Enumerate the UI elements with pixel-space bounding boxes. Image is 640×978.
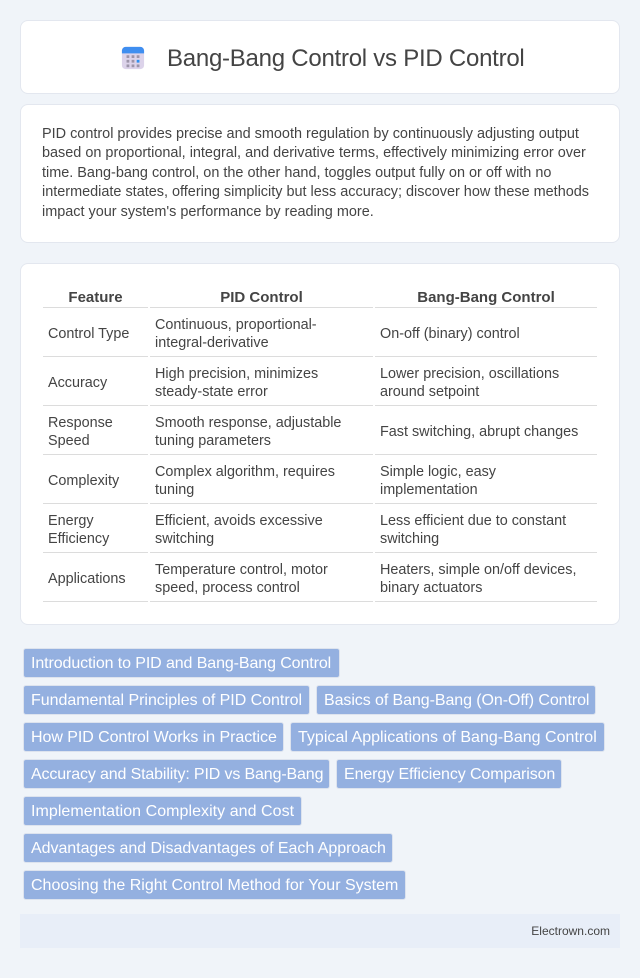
row: applications: Applications	[48, 571, 126, 587]
title: Bang-Bang Control vs PID Control	[167, 45, 525, 72]
row: energy efficiency: Energy	[48, 513, 94, 529]
table header row: PID Control	[220, 289, 303, 306]
row: applications: binary actuators	[380, 580, 482, 596]
row: response speed: Fast switching, abrupt changes	[380, 424, 578, 440]
tag: bang-bang basics	[316, 685, 596, 715]
tag: accuracy and stability	[23, 759, 330, 789]
table header row	[43, 289, 597, 308]
row: energy efficiency	[43, 513, 597, 553]
row: complexity: Complex algorithm, requires	[155, 464, 335, 480]
row: response speed: Smooth response, adjustable	[155, 415, 341, 431]
text block: introduction paragraph: based on proportional, integral, and derivative terms, effectively minimizing error over	[42, 145, 586, 161]
tag: PID in practice	[23, 722, 284, 752]
tag: advantages and disadvantages: Advantages and Disadvantages of Each Approach	[31, 840, 386, 857]
tag: energy efficiency: Energy Efficiency Comparison	[344, 766, 555, 783]
table header row: Feature	[68, 289, 123, 306]
panel: topic links	[23, 648, 605, 900]
tag: implementation complexity: Implementation Complexity and Cost	[31, 803, 294, 820]
tag: typical applications: Typical Applications of Bang-Bang Control	[298, 729, 597, 746]
tag: accuracy and stability: Accuracy and Stability: PID vs Bang-Bang	[31, 766, 323, 783]
row: complexity	[43, 464, 597, 504]
footer	[20, 914, 620, 948]
row: response speed	[43, 415, 597, 455]
text block: introduction paragraph: PID control provides precise and smooth regulation by continuously adjusting output	[42, 126, 579, 142]
row: complexity: implementation	[380, 482, 478, 498]
panel: header	[20, 20, 620, 94]
row: accuracy: Lower precision, oscillations	[380, 366, 559, 382]
row: complexity: Complexity	[48, 473, 119, 489]
tag: advantages and disadvantages	[23, 833, 393, 863]
row: applications: Temperature control, motor	[155, 562, 328, 578]
row: control type	[43, 317, 597, 357]
text block: introduction paragraph: time. Bang-bang control, on the other hand, toggles output fully on or off with no	[42, 165, 551, 181]
tag: bang-bang basics: Basics of Bang-Bang (On-Off) Control	[324, 692, 589, 709]
tag: fundamental principles	[23, 685, 310, 715]
tag: choosing the right method	[23, 870, 406, 900]
row: response speed: Speed	[48, 433, 90, 449]
text block: introduction paragraph	[42, 126, 589, 220]
row: accuracy: around setpoint	[380, 384, 479, 400]
tag: energy efficiency	[336, 759, 562, 789]
tag: typical applications	[290, 722, 605, 752]
row: accuracy: steady-state error	[155, 384, 268, 400]
tag: implementation complexity	[23, 796, 302, 826]
panel: introduction	[20, 104, 620, 243]
row: control type: integral-derivative	[155, 335, 269, 351]
tag: introduction	[23, 648, 340, 678]
row: energy efficiency: switching	[155, 531, 214, 547]
text block: introduction paragraph: impact your system's performance by reading more.	[42, 204, 374, 220]
row: accuracy	[43, 366, 597, 406]
tag: fundamental principles: Fundamental Principles of PID Control	[31, 692, 302, 709]
icon: calendar grid	[122, 46, 144, 70]
row: applications	[43, 562, 597, 602]
tag: introduction: Introduction to PID and Bang-Bang Control	[31, 655, 331, 672]
row: accuracy: Accuracy	[48, 375, 107, 391]
tag: choosing the right method: Choosing the Right Control Method for Your System	[31, 877, 398, 894]
text block: introduction paragraph: intermediate states, offering simplicity but less accuracy; discover how these methods	[42, 184, 589, 200]
panel: comparison table	[20, 263, 620, 625]
footer credit: Electrown.com	[531, 924, 610, 938]
row: energy efficiency: Efficient, avoids excessive	[155, 513, 323, 529]
tag: PID in practice: How PID Control Works in Practice	[31, 729, 277, 746]
row: response speed: Response	[48, 415, 113, 431]
row: accuracy: High precision, minimizes	[155, 366, 318, 382]
row: response speed: tuning parameters	[155, 433, 271, 449]
table header row: Bang-Bang Control	[417, 289, 555, 306]
row: energy efficiency: switching	[380, 531, 439, 547]
row: complexity: Simple logic, easy	[380, 464, 496, 480]
row: control type: Continuous, proportional-	[155, 317, 317, 333]
row: energy efficiency: Efficiency	[48, 531, 109, 547]
row: complexity: tuning	[155, 482, 194, 498]
row: applications: Heaters, simple on/off devices,	[380, 562, 577, 578]
row: energy efficiency: Less efficient due to constant	[380, 513, 566, 529]
row: control type: Control Type	[48, 326, 129, 342]
row: control type: On-off (binary) control	[380, 326, 520, 342]
row: applications: speed, process control	[155, 580, 300, 596]
